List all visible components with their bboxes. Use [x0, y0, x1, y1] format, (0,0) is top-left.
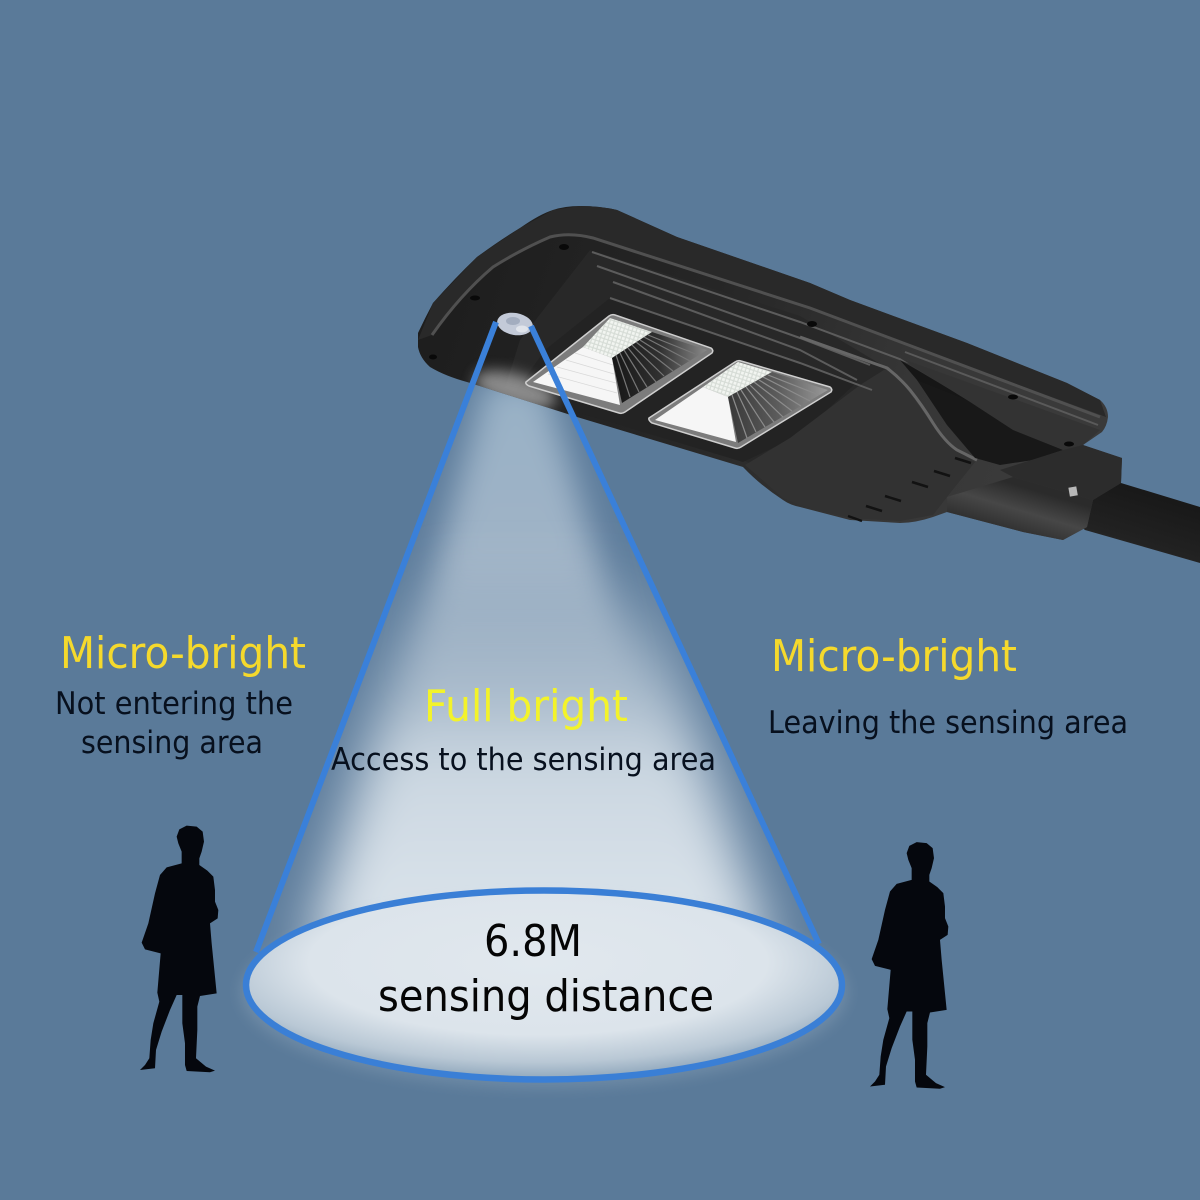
street lamp	[418, 206, 1122, 540]
right heading: Micro-bright: Micro-bright	[771, 631, 1017, 682]
tray recess	[505, 250, 965, 500]
rear rim band	[418, 206, 1106, 417]
sensor glow	[470, 363, 560, 417]
rim highlight	[432, 235, 1100, 417]
center heading: Full bright: Full bright	[424, 681, 628, 732]
screws	[429, 244, 1074, 446]
PIR sensor	[495, 310, 535, 338]
left heading: Micro-bright: Micro-bright	[60, 628, 306, 679]
panel edge plate	[900, 358, 1100, 450]
lamp body	[418, 206, 1122, 540]
distance label: 6.8M	[484, 916, 582, 967]
floor ellipse glow	[240, 896, 848, 1088]
right description: Leaving the sensing area	[768, 705, 1128, 741]
center description: Access to the sensing area	[331, 742, 716, 778]
left description	[55, 686, 293, 761]
bracket	[1000, 445, 1122, 500]
LED panel 2	[649, 361, 832, 448]
distance label	[378, 916, 714, 1022]
curved highlight	[800, 337, 977, 460]
collar	[947, 477, 1093, 540]
bolt	[1068, 486, 1078, 497]
left description: Not entering the	[55, 686, 293, 722]
distance label: sensing distance	[378, 971, 714, 1022]
right person silhouette	[870, 842, 948, 1089]
cone edge lines	[256, 322, 819, 952]
panel hollow	[900, 360, 1063, 458]
vent slots	[848, 458, 971, 521]
ridge lines	[592, 252, 1085, 428]
sensing area ellipse	[246, 890, 842, 1080]
left person silhouette	[140, 826, 218, 1072]
LED bay	[515, 298, 857, 462]
light cone	[271, 385, 808, 943]
panel highlight line	[905, 352, 1098, 425]
panel hollow lower shade	[917, 380, 1063, 465]
left description: sensing area	[81, 725, 263, 761]
LED panel 1	[526, 315, 713, 413]
head lower body	[745, 368, 975, 521]
pole	[1060, 470, 1200, 563]
